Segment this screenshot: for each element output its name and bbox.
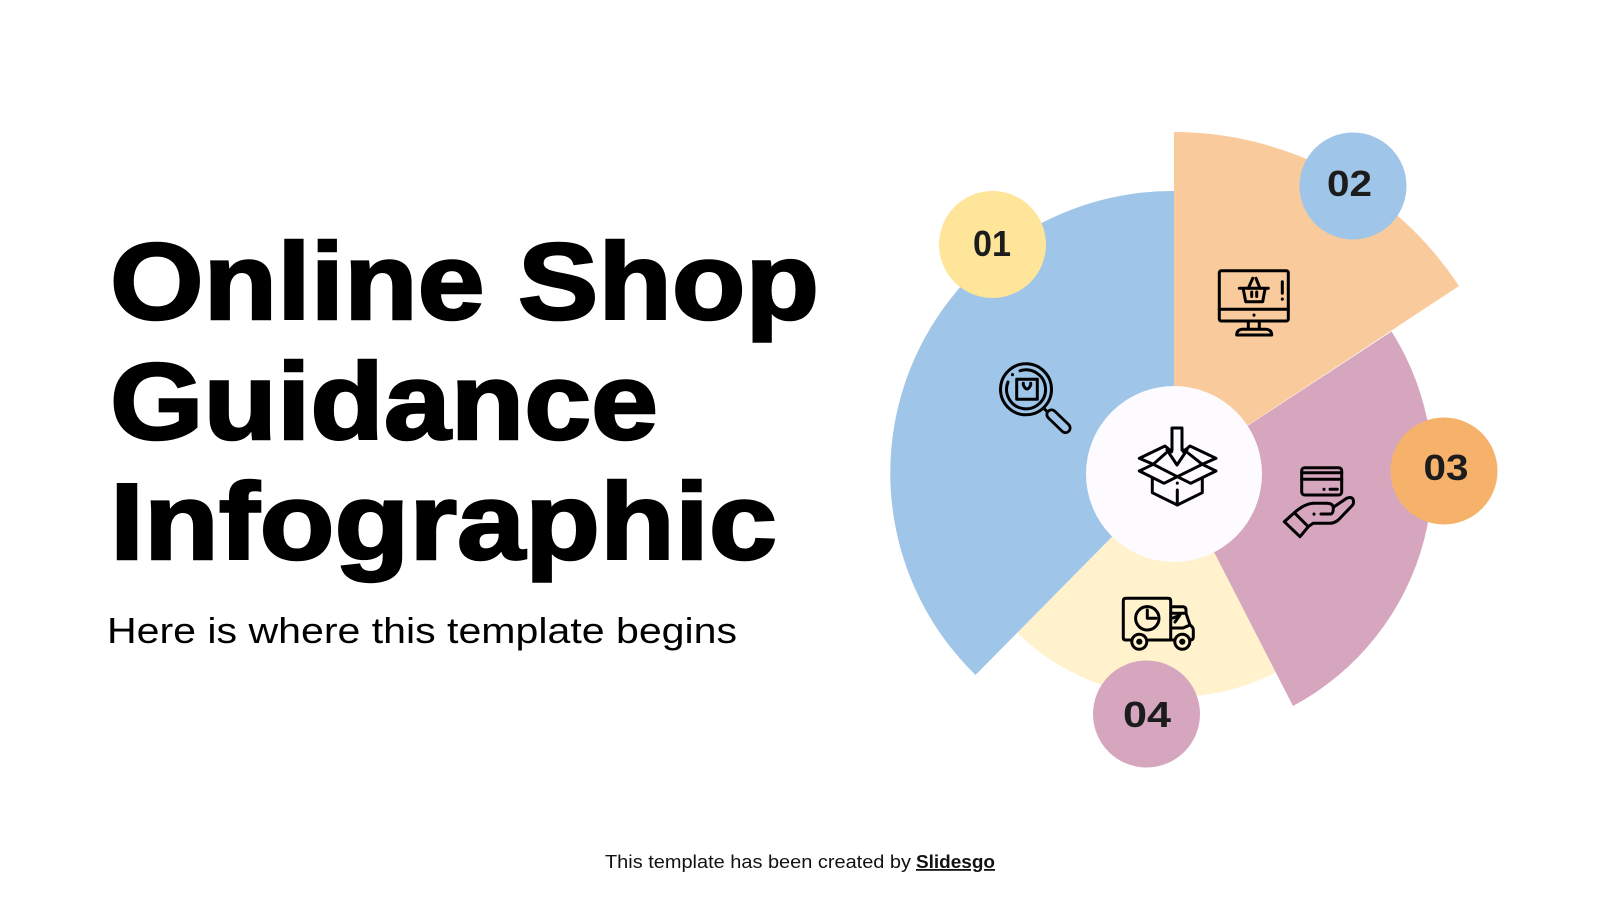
icon: hand holding card — [1284, 468, 1354, 537]
badge 03 — [1390, 418, 1498, 524]
title: Online Shop — [110, 221, 819, 343]
segment 03: pink — [1174, 332, 1433, 706]
badge 04: 04 — [1123, 694, 1171, 735]
badge 02: 02 — [1327, 163, 1372, 204]
title: Guidance — [110, 341, 658, 463]
icon: open box with arrow — [1139, 428, 1216, 505]
badge 03: 03 — [1424, 447, 1468, 488]
badge 04 — [1093, 660, 1200, 768]
centre circle — [1086, 386, 1262, 562]
segment 02: orange — [1174, 132, 1459, 474]
subtitle: Here is where this template begins — [107, 610, 737, 651]
icon: magnifier with shopping bag — [1000, 364, 1066, 428]
title — [110, 221, 819, 583]
icon: delivery truck with clock — [1123, 598, 1193, 649]
footer credit: This template has been created by — [605, 852, 911, 872]
title: Infographic — [110, 461, 777, 583]
segment 01: blue — [890, 191, 1174, 675]
segment 04: light yellow — [1017, 474, 1276, 697]
badge 01 — [939, 191, 1046, 298]
badge 01: 01 — [973, 223, 1011, 264]
footer credit: Slidesgo — [916, 852, 995, 872]
radial diagram — [890, 132, 1498, 768]
icon: monitor with basket — [1219, 271, 1288, 335]
badge 02 — [1300, 132, 1406, 240]
